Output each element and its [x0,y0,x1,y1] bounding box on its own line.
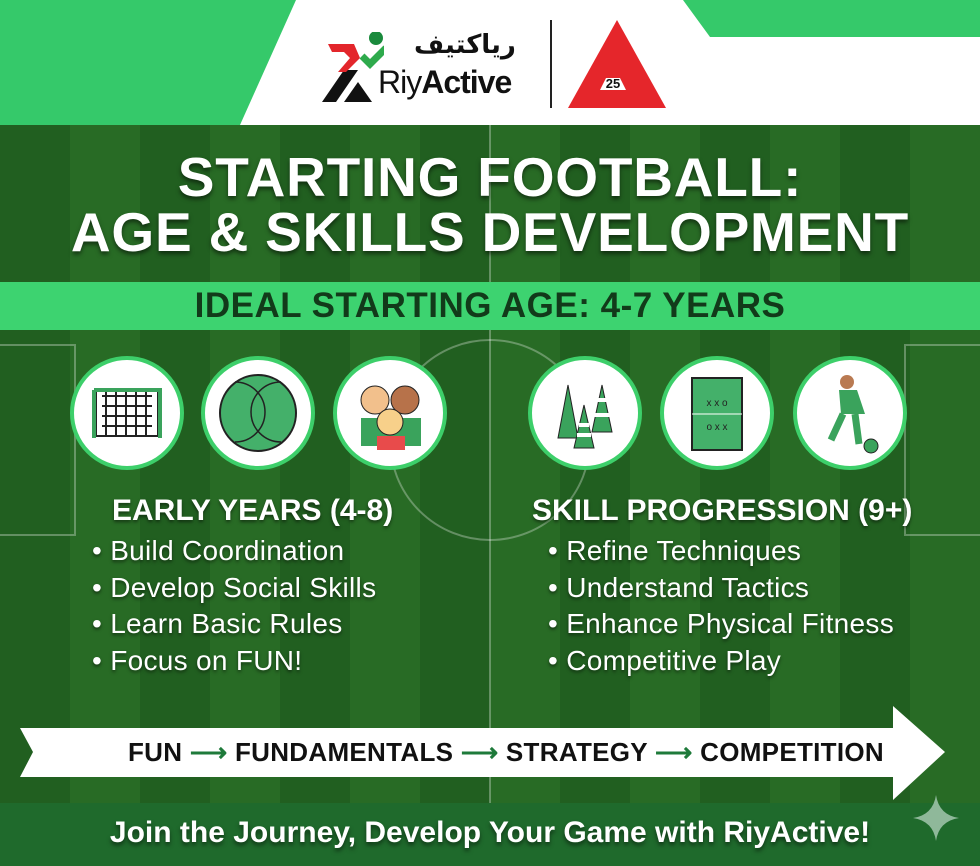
logo: 25 triangle: 25 [606,76,620,91]
age band [0,282,980,330]
icon: tactics board [660,356,774,470]
list: skill progression: Enhance Physical Fitness [566,608,894,639]
arrow: pathway [20,706,945,800]
field background [0,125,980,803]
list: early years [92,535,376,676]
list: early years: Learn Basic Rules [110,608,343,639]
footer band [0,803,980,866]
title: STARTING FOOTBALL: [178,146,802,208]
logo: RiyActive: RiyActive [378,64,511,100]
icon: goal [70,356,184,470]
list: early years: Build Coordination [110,535,344,566]
age band: IDEAL STARTING AGE: 4-7 YEARS [195,286,785,325]
heading: early years: EARLY YEARS (4-8) [112,494,393,527]
list: skill progression: Refine Techniques [566,535,801,566]
icon: sparkle [913,795,959,841]
heading: skill progression: SKILL PROGRESSION (9+) [532,494,912,527]
list: skill progression: Competitive Play [566,644,781,676]
list: early years: Develop Social Skills [110,572,376,602]
icon: cones [528,356,642,470]
divider [550,20,552,108]
panel: skill progression [532,494,912,680]
icon: player [793,356,907,470]
list: skill progression [548,535,894,680]
title [71,146,910,263]
title: AGE & SKILLS DEVELOPMENT [71,201,909,263]
footer text: Join the Journey, Develop Your Game with RiyActive! [110,816,870,849]
panel: early years [92,494,394,676]
icon: tactics board: o x x [706,422,728,433]
list: early years: Focus on FUN! [110,644,302,676]
icon: tactics board: x x o [706,398,728,409]
arrow: pathway: FUN ⟶ FUNDAMENTALS ⟶ STRATEGY ⟶ COMPETITION [128,737,884,767]
logo: RiyActive: رياكتيف [414,30,516,60]
header band [0,0,980,125]
logo: 25 triangle [568,20,666,108]
logo: RiyActive [322,30,516,102]
list: skill progression: Understand Tactics [566,572,809,602]
icon: kids [333,356,447,470]
icon: ball [201,356,315,470]
